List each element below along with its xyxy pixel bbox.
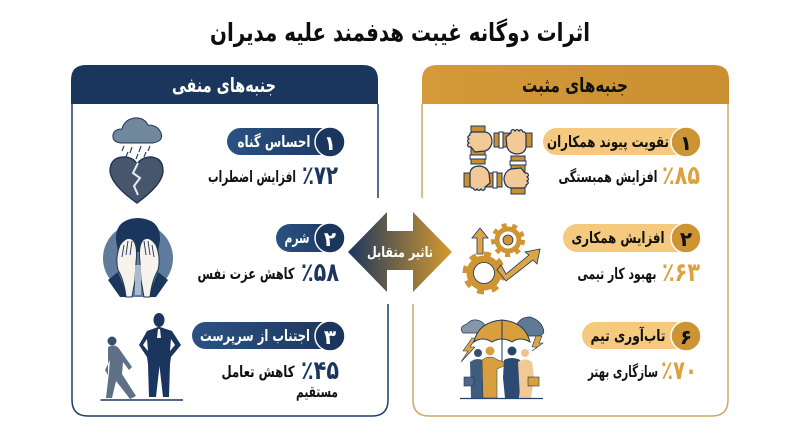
icon: storm cloud over broken heart: [110, 118, 163, 203]
stat: 85%: [558, 161, 700, 191]
stat: 63%: [578, 258, 700, 288]
panel: positive aspects: [413, 65, 729, 416]
panel frame: [413, 104, 728, 416]
pill: avoidance: اجتناب از سرپرست: [200, 327, 310, 346]
stat: 72%: [208, 161, 338, 191]
stat: 58%: [198, 258, 339, 288]
stat: 45%: مستقیم: [296, 383, 338, 401]
pill: shame: شرم: [284, 229, 310, 247]
stat: 72%: افزایش اضطراب: [208, 168, 296, 186]
stat: 58%: کاهش عزت نفس: [198, 265, 295, 283]
stat: 70%: [587, 356, 697, 386]
pill: guilt: ۱: [324, 131, 336, 155]
panel header: negative: [71, 65, 378, 104]
icon: manager and retreating employee: [100, 313, 183, 400]
stat: 72%: ٪۷۲: [302, 161, 338, 191]
pill: resilience: تاب‌آوری تیم: [590, 326, 666, 345]
panel frame: [72, 104, 388, 416]
item 1: strengthening colleague bonds: [464, 126, 701, 194]
pill: resilience: ۶: [680, 325, 692, 349]
icon: gears and rising arrow: [465, 225, 540, 292]
item 3: team resilience: [460, 317, 701, 398]
pill: cooperation: [563, 223, 701, 253]
stat: 58%: ٪۵۸: [301, 258, 339, 288]
pill: cooperation: افزایش همکاری: [572, 229, 664, 247]
pill: bonds: تقویت پیوند همکاران: [547, 133, 669, 152]
icon: team under umbrella in storm: [460, 317, 544, 398]
pill: avoidance: ۳: [324, 325, 336, 349]
pill: shame: [276, 223, 345, 253]
pill: resilience: [582, 321, 701, 351]
panel: negative aspects: [71, 65, 388, 416]
pill: guilt: [227, 127, 345, 157]
stat: 63%: بهبود کار تیمی: [578, 265, 656, 283]
stat: 63%: ٪۶۳: [662, 258, 700, 288]
icon: four interlocked hands: [464, 126, 532, 194]
stat: 45%: ٪۴۵: [301, 356, 339, 386]
pill: guilt: احساس گناه: [238, 132, 310, 151]
pill: bonds: [543, 127, 701, 157]
item 1: guilt: [110, 118, 345, 203]
panel header: positive: جنبه‌های مثبت: [522, 73, 628, 97]
item 3: avoiding the manager: [100, 313, 345, 401]
item 2: shame: [103, 218, 345, 297]
stat: 70%: ٪۷۰: [661, 356, 697, 386]
stat: 70%: سازگاری بهتر: [587, 362, 658, 381]
stat: 85%: ٪۸۵: [662, 161, 700, 191]
stat: 45%: [222, 356, 339, 401]
pill: bonds: ۱: [680, 131, 692, 155]
stat: 45%: کاهش تعامل: [222, 363, 295, 381]
pill: cooperation: ۲: [680, 227, 692, 251]
panel header: negative: جنبه‌های منفی: [172, 73, 276, 97]
double arrow: mutual effect: [348, 212, 452, 292]
panel header: positive: [422, 65, 729, 104]
double arrow: mutual effect: تاثیر متقابل: [367, 245, 433, 261]
title: اثرات دوگانه غیبت هدفمند علیه مدیران: [210, 18, 590, 48]
item 2: increased cooperation: [465, 223, 701, 292]
pill: shame: ۲: [324, 227, 336, 251]
icon: person covering face: [103, 218, 173, 297]
pill: avoidance: [192, 321, 345, 351]
stat: 85%: افزایش همبستگی: [558, 167, 658, 186]
